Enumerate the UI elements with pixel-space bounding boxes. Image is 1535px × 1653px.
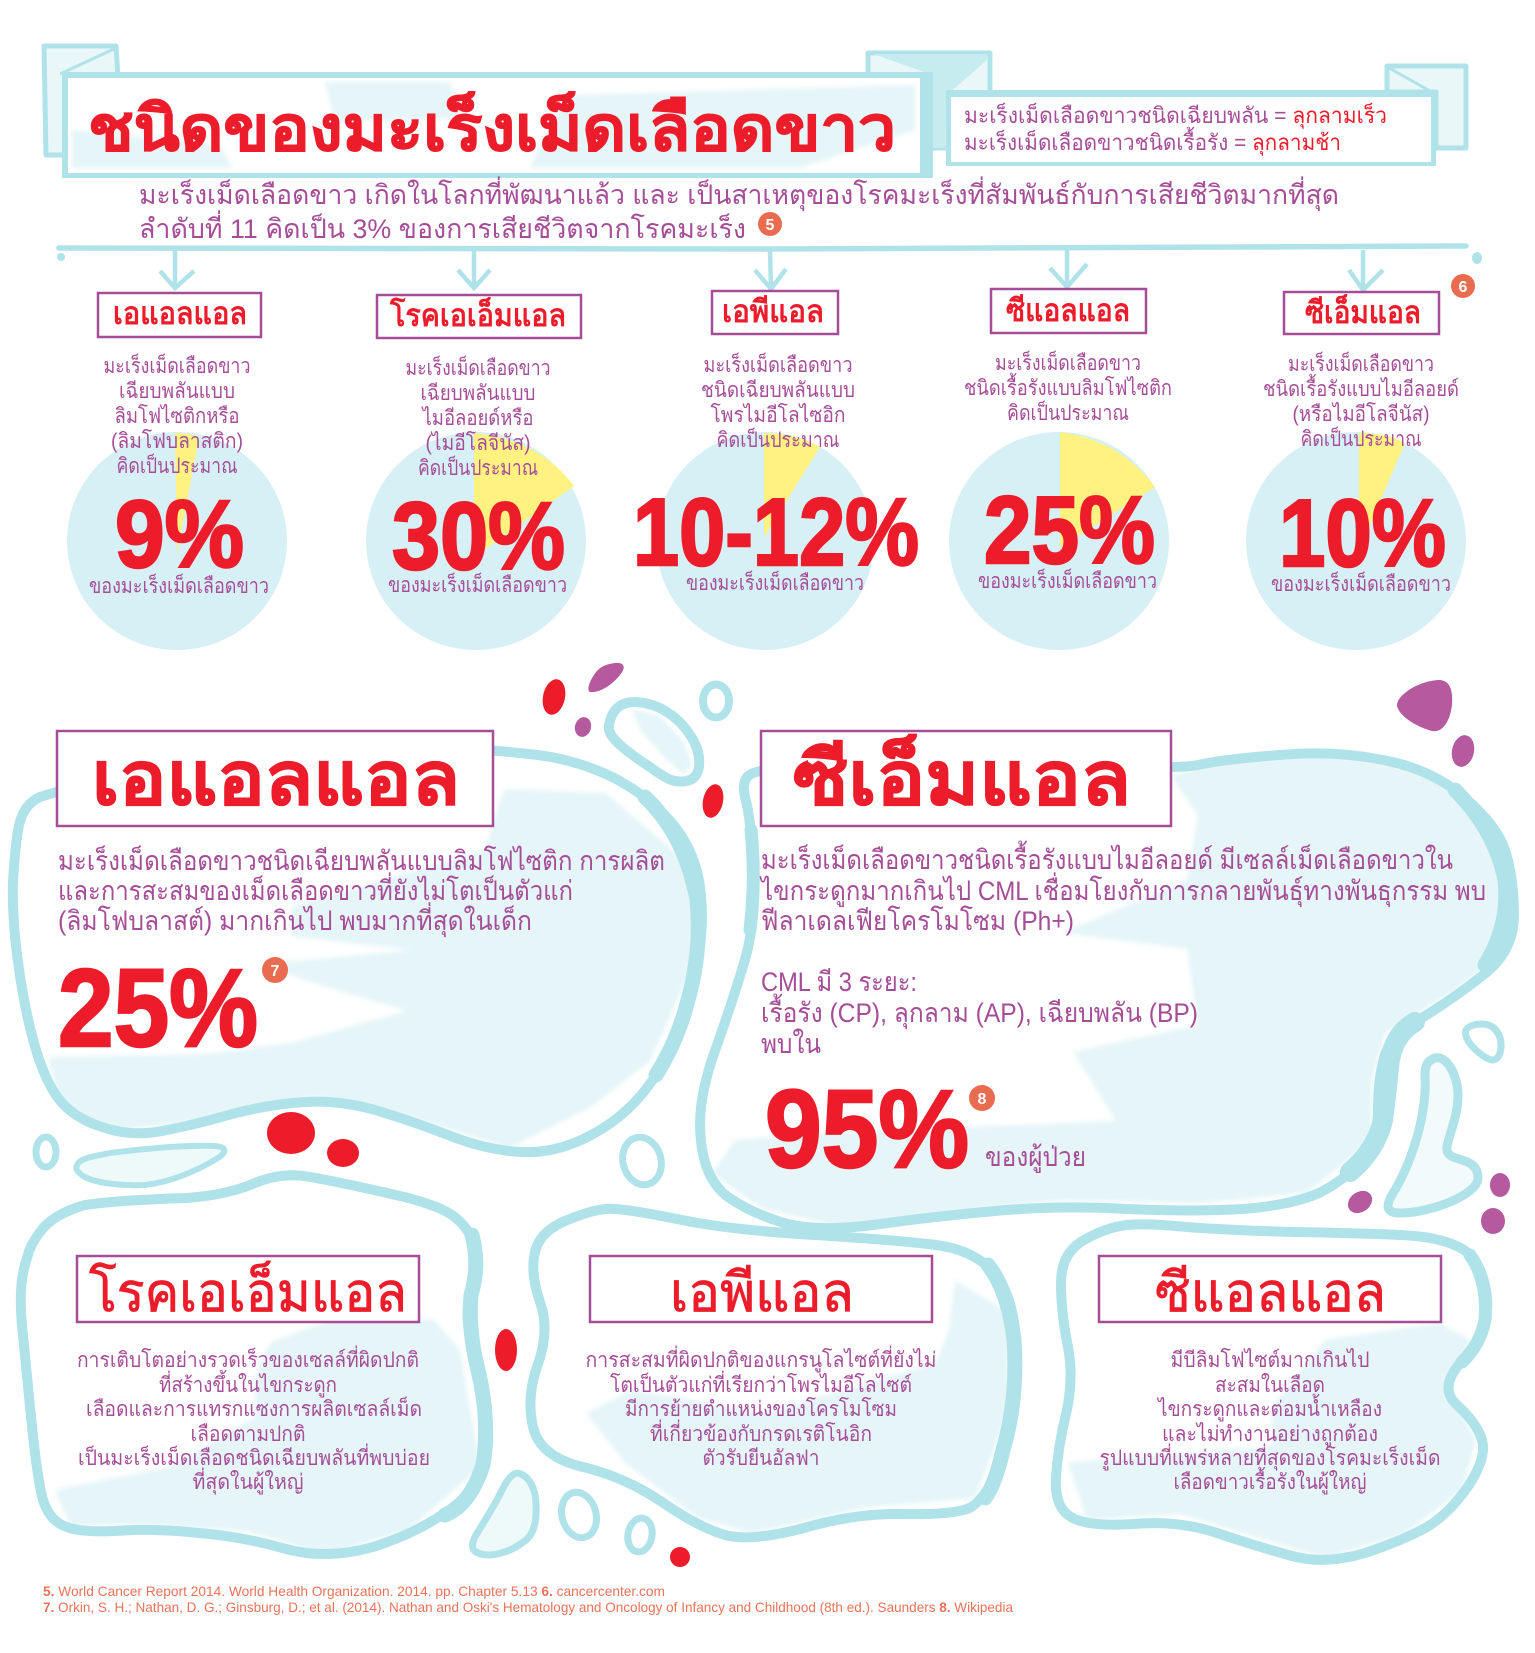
- value: 10%: [1279, 480, 1446, 587]
- references: [43, 1583, 1013, 1615]
- description: มะเร็งเม็ดเลือดขาว: [406, 354, 550, 380]
- body text: เรื้อรัง (CP), ลุกลาม (AP), เฉียบพลัน (BP): [761, 993, 1198, 1030]
- body text: โตเป็นตัวแก่ที่เรียกว่าโพรไมอีโลไซต์: [610, 1370, 912, 1397]
- description: ลิมโฟไซติกหรือ: [114, 404, 240, 428]
- arrows: [160, 250, 1383, 290]
- intro text: ลำดับที่ 11 คิดเป็น 3% ของการเสียชีวิตจากโรคมะเร็ง: [139, 210, 746, 244]
- body text: มีการย้ายตำแหน่งของโครโมโซม: [625, 1397, 897, 1421]
- reference badge 6: [1451, 274, 1475, 298]
- body text: (ลิมโฟบลาสต์) มากเกินไป พบมากที่สุดในเด็ก: [58, 902, 532, 938]
- value 25%: 25%: [58, 947, 258, 1070]
- description: [964, 349, 1172, 425]
- caption: ของมะเร็งเม็ดเลือดขาว: [89, 572, 269, 598]
- panel: ALL share: [67, 293, 287, 650]
- blob outline: [1056, 1224, 1487, 1560]
- description: [1263, 350, 1459, 451]
- body text: ที่สุดในผู้ใหญ่: [192, 1467, 304, 1495]
- intro text: [139, 176, 1339, 244]
- heading box: โรคเอเอ็มแอล: [89, 1261, 407, 1323]
- pie: 10%: [1246, 432, 1466, 650]
- caption: ของมะเร็งเม็ดเลือดขาว: [1271, 570, 1451, 596]
- caption: ของมะเร็งเม็ดเลือดขาว: [978, 567, 1157, 593]
- title banner: [44, 46, 990, 178]
- caption: ของผู้ป่วย: [985, 1142, 1086, 1173]
- value: 10-12%: [633, 479, 919, 586]
- caption: ของมะเร็งเม็ดเลือดขาว: [388, 571, 567, 597]
- description: [104, 352, 250, 478]
- body text: รูปแบบที่แพร่หลายที่สุดของโรคมะเร็งเม็ด: [1100, 1443, 1440, 1471]
- body text: [759, 840, 1486, 1059]
- reference badge 7: [262, 957, 288, 983]
- label: ALL: เอแอลแอล: [113, 296, 247, 331]
- body text: [586, 1345, 936, 1470]
- panel: AML (เอแอลแอล) detail: [13, 731, 702, 1152]
- panel: CLL (ซีแอลแอล) detail: [1056, 1224, 1487, 1560]
- description: (ไมอีโลจีนัส): [426, 431, 530, 455]
- body text: เป็นมะเร็งเม็ดเลือดชนิดเฉียบพลันที่พบบ่อย: [78, 1443, 430, 1470]
- label: CLL: [991, 289, 1146, 333]
- description: เฉียบพลันแบบ: [119, 380, 235, 403]
- heading box: ซีเอ็มแอล: [793, 735, 1131, 820]
- body text: มีบีลิมโฟไซต์มากเกินไป: [1170, 1348, 1370, 1372]
- blob outline: [13, 747, 702, 1152]
- label: APL: เอพีแอล: [722, 294, 824, 329]
- description: ไมอีลอยด์หรือ: [421, 406, 534, 430]
- body text: ไขกระดูกและต่อมน้ำเหลือง: [1156, 1394, 1382, 1422]
- decorative droplets upper: [539, 663, 1477, 820]
- body text: CML มี 3 ระยะ:: [761, 967, 917, 997]
- panel: CLL share: [949, 289, 1172, 650]
- description: (ลิมโฟบลาสติก): [111, 429, 243, 453]
- body text: [77, 1345, 430, 1495]
- references: 5. World Cancer Report 2014. World Health Organization. 2014. pp. Chapter 5.13 6. cancercenter.com: [43, 1583, 665, 1599]
- reference badge 5: 5: [766, 217, 775, 234]
- description: ชนิดเรื้อรังแบบลิมโฟไซติก: [964, 373, 1172, 400]
- body text: [1100, 1348, 1440, 1495]
- panel: AML (โรคเอเอ็มแอล) detail: [21, 1175, 488, 1554]
- definition banner: [946, 66, 1466, 166]
- panel: CML share: [1246, 292, 1466, 650]
- pie: 9%: [67, 432, 287, 650]
- heading box: ซีแอลแอล: [1155, 1263, 1386, 1323]
- description: ชนิดเรื้อรังแบบไมอีลอยด์: [1263, 374, 1459, 401]
- body text: และการสะสมของเม็ดเลือดขาวที่ยังไม่โตเป็นตัวแก่: [58, 872, 573, 906]
- description: มะเร็งเม็ดเลือดขาว: [1288, 350, 1434, 376]
- description: โพรไมอีโลไซอิก: [710, 403, 846, 427]
- description: คิดเป็นประมาณ: [716, 426, 840, 452]
- body text: การเติบโตอย่างรวดเร็วของเซลล์ที่ผิดปกติ: [77, 1345, 419, 1372]
- label: AML: โรคเอเอ็มแอล: [389, 296, 566, 333]
- description: คิดเป็นประมาณ: [1007, 399, 1129, 425]
- blob outline: [530, 1209, 1017, 1537]
- description: ชนิดเฉียบพลันแบบ: [701, 379, 855, 402]
- heading box: [590, 1256, 932, 1323]
- caption: ของมะเร็งเม็ดเลือดขาว: [686, 569, 864, 595]
- blob outline: [21, 1175, 488, 1554]
- body text: พบใน: [761, 1028, 821, 1059]
- body text: สะสมในเลือด: [1215, 1373, 1325, 1397]
- intro text: มะเร็งเม็ดเลือดขาว เกิดในโลกที่พัฒนาแล้ว และ เป็นสาเหตุของโรคมะเร็งที่สัมพันธ์กับการเสียชีวิตมากที่สุด: [139, 176, 1339, 212]
- pie: 30%: [366, 432, 586, 650]
- heading box: [57, 731, 493, 826]
- body text: และไม่ทำงานอย่างถูกต้อง: [1162, 1422, 1378, 1447]
- main title: ชนิดของมะเร็งเม็ดเลือดขาว: [88, 91, 896, 164]
- reference badge 8: 8: [978, 1091, 987, 1108]
- value: 25%: [984, 477, 1155, 584]
- body text: ที่เกี่ยวข้องกับกรดเรติโนอิก: [650, 1419, 872, 1446]
- body text: เลือดและการแทรกแซงการผลิตเซลล์เม็ด: [86, 1395, 422, 1421]
- panel: APL share: [633, 291, 919, 650]
- body text: ที่สร้างขึ้นในไขกระดูก: [159, 1370, 337, 1398]
- body text: [58, 843, 665, 938]
- blob outline: [700, 753, 1514, 1228]
- reference badge 8: [969, 1085, 995, 1111]
- decorative droplets middle: [36, 1024, 1510, 1234]
- decorative droplets lower: [472, 1329, 690, 1567]
- body text: ตัวรับยีนอัลฟา: [702, 1447, 820, 1470]
- horizontal branch line: [57, 246, 1482, 264]
- heading box: เอแอลแอล: [92, 737, 460, 820]
- panel: APL (เอพีแอล) detail: [530, 1209, 1017, 1537]
- reference badge 7: 7: [271, 963, 280, 980]
- reference badge 6: 6: [1459, 279, 1468, 296]
- references: 7. Orkin, S. H.; Nathan, D. G.; Ginsburg, D.; et al. (2014). Nathan and Oski's Hematology and Oncology of Infancy and Childhood (8th ed.). Saunders 8. Wikipedia: [43, 1599, 1013, 1615]
- description: คิดเป็นประมาณ: [418, 454, 538, 480]
- body text: การสะสมที่ผิดปกติของแกรนูโลไซต์ที่ยังไม่: [586, 1345, 936, 1373]
- body text: เลือดตามปกติ: [190, 1423, 306, 1446]
- description: (หรือไมอีโลจีนัส): [1292, 402, 1430, 426]
- reference badge 5: [758, 212, 782, 236]
- description: [701, 351, 855, 452]
- definition lines: มะเร็งเม็ดเลือดขาวชนิดเรื้อรัง = ลุกลามช้า: [964, 127, 1341, 156]
- pie: 25%: [949, 432, 1169, 650]
- label: CML: [1284, 292, 1439, 334]
- body text: มะเร็งเม็ดเลือดขาวชนิดเฉียบพลันแบบลิมโฟไซติก การผลิต: [58, 843, 665, 876]
- description: [406, 354, 550, 480]
- panel: AML share: [366, 295, 586, 650]
- heading box: เอพีแอล: [670, 1263, 854, 1323]
- value: 9%: [115, 481, 244, 588]
- description: เฉียบพลันแบบ: [420, 382, 536, 405]
- description: มะเร็งเม็ดเลือดขาว: [995, 349, 1141, 375]
- label: APL: [712, 291, 838, 334]
- definition lines: มะเร็งเม็ดเลือดขาวชนิดเฉียบพลัน = ลุกลามเร็ว: [964, 101, 1387, 129]
- body text: มะเร็งเม็ดเลือดขาวชนิดเรื้อรังแบบไมอีลอยด์ มีเซลล์เม็ดเลือดขาวใน: [761, 840, 1453, 875]
- label: CLL: ซีแอลแอล: [1006, 293, 1130, 328]
- description: มะเร็งเม็ดเลือดขาว: [704, 351, 852, 377]
- value 95%: 95%: [765, 1068, 969, 1191]
- description: มะเร็งเม็ดเลือดขาว: [104, 352, 250, 378]
- heading box: [1099, 1256, 1441, 1323]
- description: คิดเป็นประมาณ: [116, 452, 238, 478]
- body text: เลือดขาวเรื้อรังในผู้ใหญ่: [1174, 1467, 1366, 1495]
- body text: ฟีลาเดลเฟียโครโมโซม (Ph+): [761, 906, 1074, 936]
- panel: CML (ซีเอ็มแอล) detail: [700, 731, 1514, 1228]
- label: CML: ซีเอ็มแอล: [1305, 293, 1421, 330]
- definition lines: [964, 101, 1387, 156]
- heading box: [761, 731, 1171, 826]
- description: คิดเป็นประมาณ: [1300, 425, 1422, 451]
- value: 30%: [392, 483, 565, 590]
- pie: 10-12%: [656, 432, 874, 650]
